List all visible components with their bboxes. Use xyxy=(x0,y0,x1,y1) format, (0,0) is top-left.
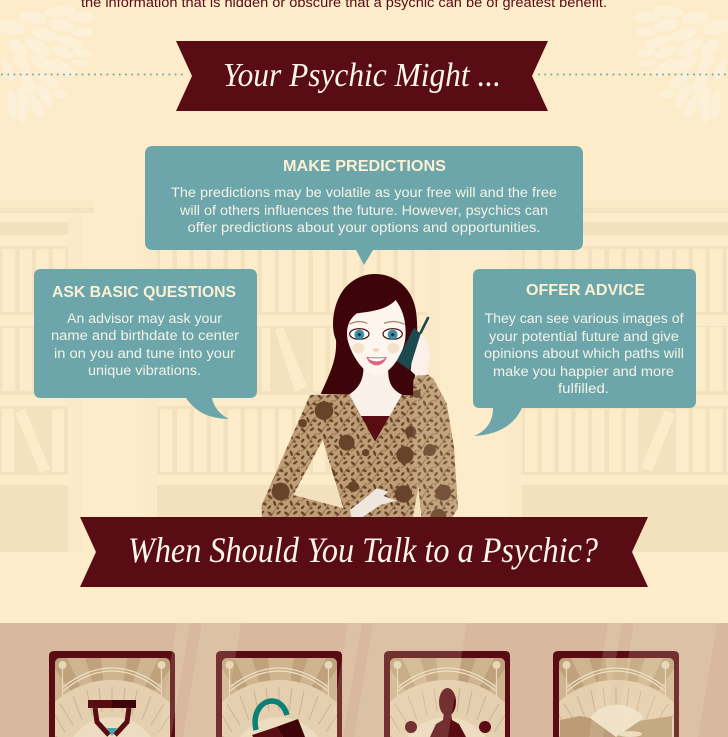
burgundy top xyxy=(357,416,393,442)
body text xyxy=(51,311,240,378)
body text: An advisor may ask your xyxy=(67,311,223,326)
nose xyxy=(373,348,379,352)
body text: offer predictions about your options and opportunities. xyxy=(188,220,540,235)
neck and chest xyxy=(348,363,403,442)
body text xyxy=(484,311,684,396)
heading: OFFER ADVICE xyxy=(526,282,645,299)
heading: MAKE PREDICTIONS xyxy=(283,158,446,175)
card: landscape with fan xyxy=(536,651,696,737)
body text: will of others influences the future. However, psychics can xyxy=(179,203,548,218)
body text: The predictions may be volatile as your free will and the free xyxy=(171,185,557,200)
woman on phone xyxy=(257,274,463,525)
body text: They can see various images of xyxy=(484,311,684,326)
speech bubble: make predictions xyxy=(145,146,583,265)
eyes xyxy=(349,322,405,340)
light stripes xyxy=(158,623,717,737)
hair xyxy=(321,274,417,396)
body text: in on you and tune into your xyxy=(54,346,236,361)
dotted line left xyxy=(2,74,183,76)
body text: unique vibrations. xyxy=(88,363,201,378)
phone xyxy=(397,318,428,370)
body text xyxy=(171,185,557,235)
body text: your potential future and give xyxy=(489,329,679,344)
bottom panel xyxy=(0,623,728,737)
icon: padlock xyxy=(252,701,305,737)
hand on desk xyxy=(350,488,397,519)
card: padlock xyxy=(199,651,359,737)
bookshelves xyxy=(0,200,728,552)
body text: name and birthdate to center xyxy=(51,328,240,343)
body text: opinions about which paths will xyxy=(484,346,684,361)
ribbon title: When Should You Talk to a Psychic? xyxy=(128,530,598,570)
cheeks xyxy=(352,343,399,354)
ribbon: when should you talk xyxy=(80,517,648,587)
dotted line right xyxy=(539,74,727,76)
body text: make you happier and more xyxy=(493,364,674,379)
icon: hourglass xyxy=(88,700,136,736)
icon: meditating figure xyxy=(405,688,491,737)
decorative flower right xyxy=(633,5,728,124)
lips xyxy=(366,357,387,365)
ribbon: your psychic might xyxy=(176,41,548,111)
heading: ASK BASIC QUESTIONS xyxy=(52,284,236,301)
floral blouse xyxy=(262,374,458,517)
ribbon title: Your Psychic Might ... xyxy=(223,57,501,94)
decorative flower left xyxy=(0,5,95,124)
body text: fulfilled. xyxy=(558,381,609,396)
card: meditation xyxy=(367,651,527,737)
hand on phone xyxy=(411,332,430,376)
icon: fan and mountains xyxy=(560,705,672,737)
speech bubble: offer advice xyxy=(473,269,696,436)
card: hourglass xyxy=(32,651,192,737)
speech bubble: ask basic questions xyxy=(34,269,257,419)
face xyxy=(347,300,406,376)
